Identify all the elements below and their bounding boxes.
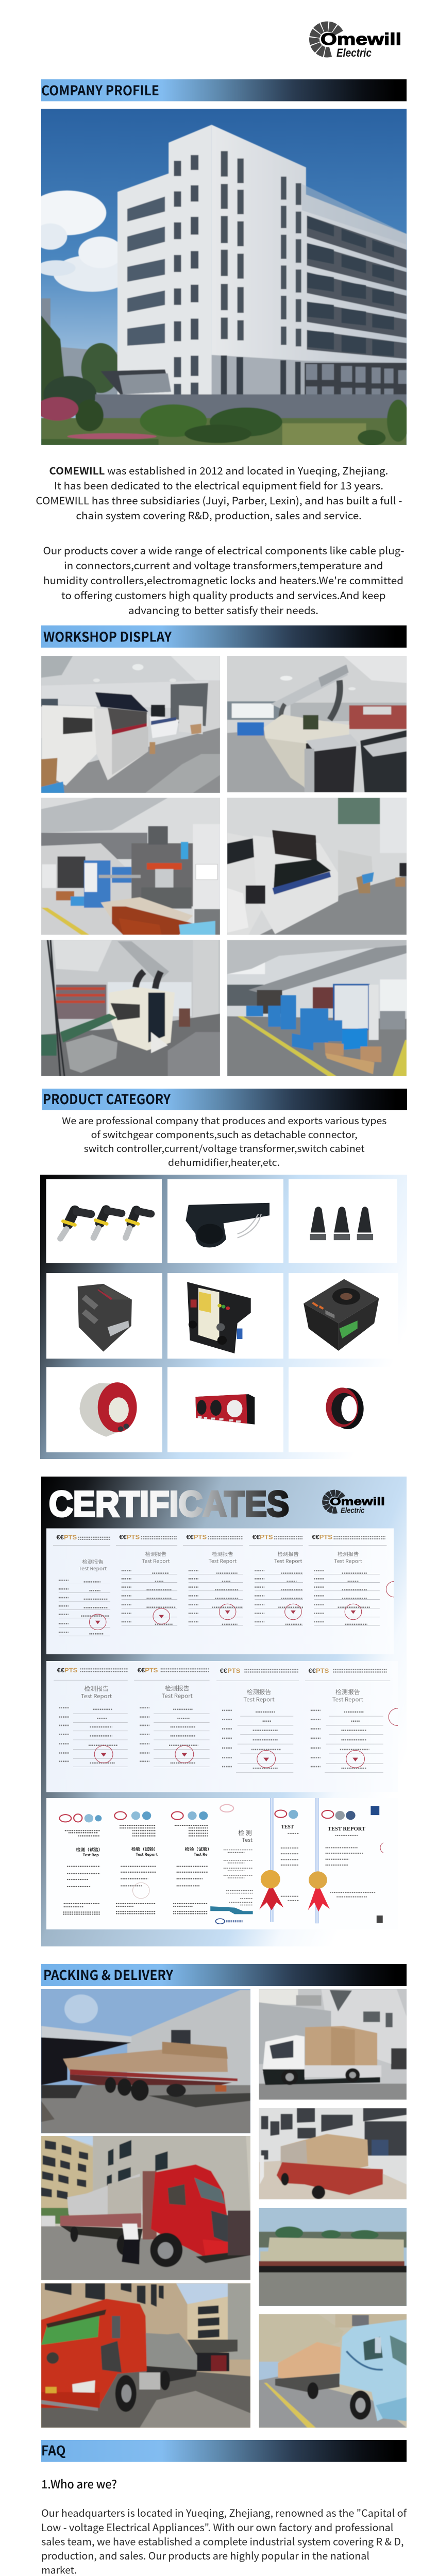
text block: company introduction: Our products cover a wide range of electrical components like cable plug- <box>43 543 404 557</box>
certificates row 2: test reports: €€PTS <box>57 1667 77 1674</box>
certificates row 1: test reports: Test Report <box>334 1557 362 1565</box>
photo: workshop wave soldering machine <box>41 940 220 1076</box>
text block: company introduction: advancing to better satisfy their needs. <box>128 602 318 617</box>
certificates row 2: test reports: €€PTS <box>309 1667 329 1674</box>
FAQ 1: who are we: 1.Who are we? <box>41 2476 117 2492</box>
heading: workshop display <box>41 625 407 648</box>
certificates row 3: CMA reports and ribbons: TEST <box>281 1824 294 1830</box>
certificates row 1: test reports: 检测报告 <box>82 1557 104 1565</box>
heading: packing and delivery <box>41 1964 407 1986</box>
photo: workshop printer line <box>41 656 220 793</box>
certificates row 1: test reports: €€PTS <box>57 1534 77 1541</box>
photo: workshop placement machine <box>227 798 407 935</box>
certificates row 2: test reports: Test Report <box>332 1696 363 1703</box>
photo: workshop molding press <box>41 798 220 935</box>
product: three elbow connectors <box>60 1210 151 1239</box>
product: connector clamps <box>310 1234 373 1240</box>
photo: small truck with cartons <box>259 1989 407 2100</box>
text block: company introduction: to offering customers high quality products and services.And keep <box>61 587 385 602</box>
certificates row 1: test reports: 检测报告 <box>338 1550 359 1557</box>
certificates row 3: CMA reports and ribbons: 检验（试验） <box>131 1846 158 1852</box>
photo: workshop injection area <box>227 940 407 1076</box>
text block: company introduction: COMEWILL was established in 2012 and located in Yueqing, Zhejiang. <box>49 463 388 478</box>
certificates row 3: CMA reports and ribbons: 检验（试验） <box>185 1846 212 1852</box>
certificates row 1: test reports: Test Report <box>79 1564 107 1572</box>
logo: Omewill Electric: Omewill <box>321 30 401 48</box>
heading: packing and delivery: PACKING & DELIVERY <box>43 1965 174 1984</box>
logo: Omewill Electric <box>311 24 401 59</box>
certificates row 2: test reports: €€PTS <box>220 1667 240 1674</box>
certificates row 1: test reports: €€PTS <box>119 1534 140 1540</box>
certificates row 3: CMA reports and ribbons: TEST REPORT <box>328 1826 365 1832</box>
certificates row 2: test reports: 检测报告 <box>335 1688 360 1696</box>
certificates row 2: test reports: Test Report <box>81 1692 112 1700</box>
text block: company introduction <box>36 463 404 617</box>
photo: company building <box>41 109 407 445</box>
heading: product category <box>42 1089 407 1110</box>
heading: product category: PRODUCT CATEGORY <box>43 1089 171 1108</box>
certificates row 3: CMA reports and ribbons: 检测（试验） <box>76 1846 103 1853</box>
logo: Omewill Electric: Electric <box>336 46 372 59</box>
panel: product grid <box>40 1175 407 1459</box>
certificates row 2: test reports: 检测报告 <box>165 1684 190 1692</box>
photo: workshop reflow oven <box>227 656 407 792</box>
certificates row 1: test reports: €€PTS <box>312 1534 332 1540</box>
logo: certificates header <box>324 1492 385 1515</box>
certificates row 1: test reports: Test Report <box>274 1557 302 1565</box>
photo: blue truck under canopy <box>259 2314 407 2428</box>
product: dark temperature controller <box>78 1284 132 1351</box>
text block: company introduction: chain system covering R&D, production, sales and service. <box>76 507 362 522</box>
certificates row 2: test reports: Test Report <box>243 1696 275 1703</box>
certificates row 1: test reports: Test Report <box>142 1557 170 1565</box>
certificates row 1: test reports: €€PTS <box>186 1534 207 1540</box>
logo: certificates header: Electric <box>341 1507 364 1515</box>
text block: product category intro: switch controller,current/voltage transformer,switch cabinet <box>84 1142 365 1155</box>
text block: product category intro: We are professional company that produces and exports various types <box>62 1114 386 1127</box>
text block: company introduction: It has been dedicated to the electrical equipment field for 13 years. <box>54 478 383 493</box>
heading: certificates title: CERTIFICATES <box>49 1484 289 1524</box>
product icons drawn on grid <box>60 1203 379 1437</box>
photo: orange FAW truck <box>41 2283 250 2428</box>
FAQ 1: who are we <box>41 2476 407 2576</box>
product: switch controller panel <box>187 1282 251 1353</box>
certificates row 2: test reports: €€PTS <box>138 1667 158 1674</box>
certificates row 3: CMA reports and ribbons <box>46 1798 383 1929</box>
certificates row 1: test reports <box>46 1528 394 1654</box>
heading: FAQ <box>41 2440 407 2462</box>
certificates row 3: CMA reports and ribbons: Test Report <box>136 1852 158 1857</box>
product: grey and red current transformer <box>79 1382 137 1437</box>
text block: product category intro: dehumidifier,heater,etc. <box>168 1156 280 1169</box>
text block: company introduction: humidity controllers,electromagnetic locks and heaters.We're committed <box>43 572 403 587</box>
text block: product category intro: of switchgear components,such as detachable connector, <box>91 1128 358 1141</box>
certificates row 2: test reports <box>46 1661 398 1792</box>
photo: red dropside truck with pallets <box>259 2108 407 2199</box>
certificates row 3: CMA reports and ribbons: Test <box>242 1837 252 1844</box>
FAQ 1: who are we: Low - voltage Electrical Appliances". With our own factory and professional <box>41 2519 393 2534</box>
heading: company profile <box>41 79 407 101</box>
certificates row 2: test reports: 检测报告 <box>247 1688 271 1696</box>
FAQ 1: who are we: sales team, we have established a complete industrial system covering R & D, <box>41 2534 404 2548</box>
product: three hole red transformer <box>195 1394 255 1425</box>
photo: long trailer with wrapped cargo <box>259 2208 407 2306</box>
certificates row 1: test reports: Test Report <box>209 1557 237 1565</box>
panel: certificates <box>41 1477 407 1946</box>
FAQ 1: who are we: Our headquarters is located in Yueqing, Zhejiang, renowned as the "Capital of <box>41 2505 407 2520</box>
certificates row 1: test reports: 检测报告 <box>145 1550 166 1557</box>
certificates row 2: test reports: 检测报告 <box>84 1685 109 1693</box>
heading: FAQ: FAQ <box>41 2441 65 2460</box>
photo: red truck at warehouse <box>41 2136 250 2280</box>
certificates row 3: CMA reports and ribbons: 检 测 <box>238 1829 252 1837</box>
certificates row 1: test reports: €€PTS <box>252 1534 273 1540</box>
text block: company introduction: COMEWILL has three subsidiaries (Juyi, Parber, Lexin), and has built a full - <box>36 493 402 507</box>
product: three cylinder connectors <box>311 1207 372 1232</box>
certificates row 1: test reports: 检测报告 <box>212 1550 233 1557</box>
heading: company profile: COMPANY PROFILE <box>41 80 159 99</box>
product: dehumidifier with fan <box>304 1279 379 1351</box>
product: large elbow connector <box>186 1203 269 1247</box>
text block: company introduction: in connectors,current and voltage transformers,temperature and <box>64 557 383 572</box>
FAQ 1: who are we: production, and sales. Our products are highly popular in the national <box>41 2548 369 2563</box>
certificates row 1: test reports: 检测报告 <box>278 1550 299 1557</box>
logo: certificates header: Omewill <box>330 1496 385 1507</box>
certificates row 3: CMA reports and ribbons: Test Re <box>194 1852 208 1857</box>
certificates row 3: CMA reports and ribbons: Test Rep <box>83 1852 99 1858</box>
certificates row 2: test reports: Test Report <box>162 1692 193 1700</box>
text block: product category intro <box>62 1114 386 1169</box>
photo: flatbed trailer with cartons <box>41 1989 250 2133</box>
product: black and red ring transformer <box>326 1387 364 1429</box>
heading: workshop display: WORKSHOP DISPLAY <box>43 626 172 646</box>
